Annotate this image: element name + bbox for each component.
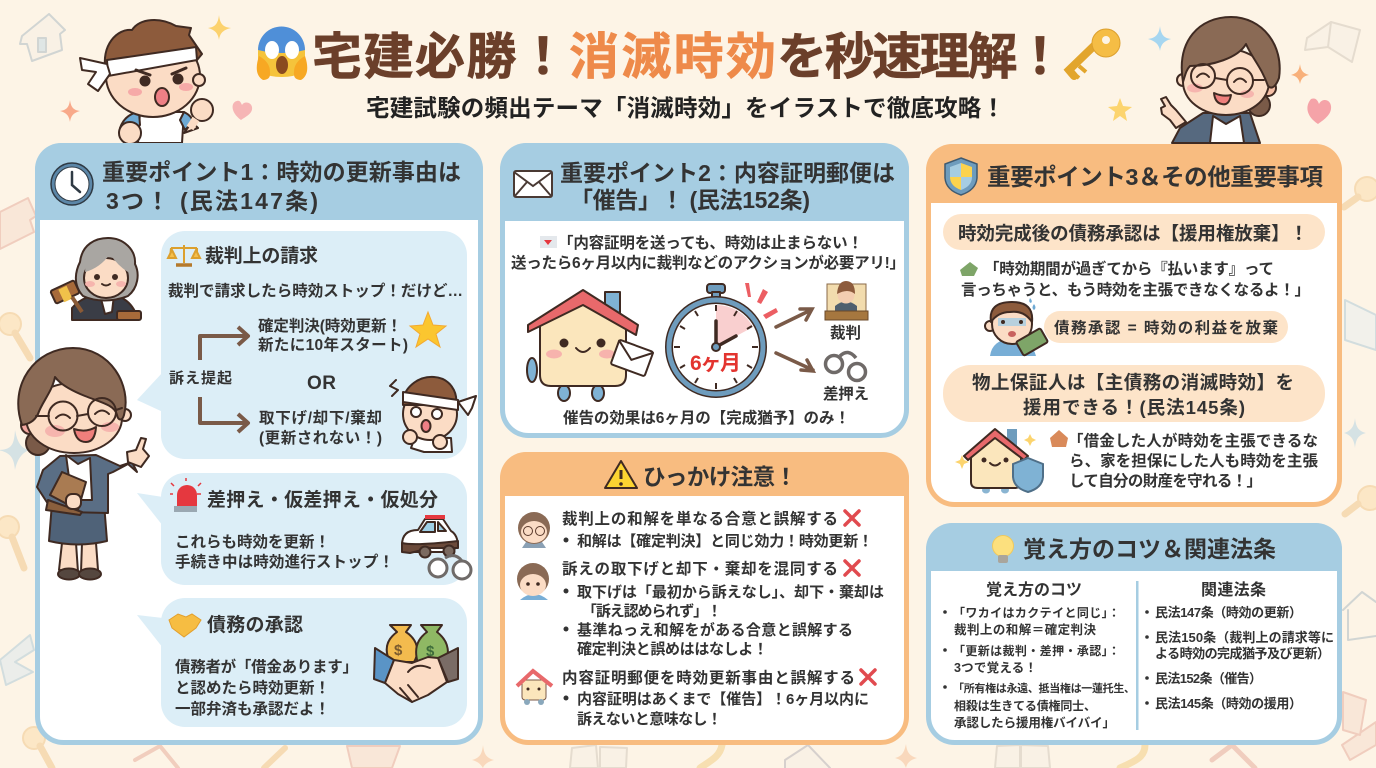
panel: important point 2: 催告の効果は6ヶ月の【完成猶予】のみ！ bbox=[563, 408, 850, 427]
quote: saying I will pay: 「時効期間が過ぎてから『払います』って bbox=[984, 259, 1274, 278]
item 2: 基準ねっえ和解をがある合意と誤解する bbox=[577, 621, 853, 639]
panel: trap warnings: ひっかけ注意！ bbox=[643, 465, 797, 490]
icon: light bulb bbox=[992, 536, 1014, 563]
callout: debt acknowledgment: 債務の承認 bbox=[207, 614, 303, 636]
icon: money bags and handshake: $ bbox=[426, 643, 435, 660]
stopwatch showing 6 months bbox=[669, 283, 778, 394]
column: memory tips: 承認したら援用権バイバイ」 bbox=[954, 715, 1115, 730]
subheading: debt acknowledgment after completion bbox=[943, 214, 1325, 250]
title: を秒速理解！ bbox=[777, 29, 1065, 85]
column: related articles: 民法152条（催告） bbox=[1155, 671, 1262, 686]
main teacher character bbox=[18, 348, 149, 580]
column: memory tips: 3つで覚える！ bbox=[954, 660, 1037, 675]
heading: point 2: 「催告」！ (民法152条) bbox=[570, 187, 810, 213]
heading: point 1: 3つ！ (民法147条) bbox=[106, 188, 318, 214]
branch arrows bbox=[200, 327, 248, 432]
column: related articles: 民法150条（裁判上の請求等に bbox=[1155, 630, 1334, 645]
callout: judicial claim: OR bbox=[307, 373, 336, 394]
panel: memory tips and related articles: 覚え方のコツ＆関連法条 bbox=[1023, 536, 1276, 562]
icon: siren bbox=[170, 478, 201, 512]
callout: judicial claim: 訴え提起 bbox=[169, 370, 232, 387]
item 1 bbox=[562, 509, 873, 550]
item 2: 訴えの取下げと却下・棄却を混同する bbox=[562, 559, 838, 578]
icon: house avatar bbox=[517, 671, 552, 705]
callout: debt acknowledgment bbox=[137, 598, 467, 727]
callout: seizure bbox=[137, 473, 471, 585]
crying boy with money bbox=[985, 298, 1048, 356]
callout: judicial claim: 取下げ/却下/棄却 bbox=[259, 408, 382, 427]
item 3: 内容証明郵便を時効更新事由と誤解する bbox=[562, 668, 855, 687]
item 3: 内容証明はあくまで【催告】！6ヶ月以内に bbox=[577, 690, 869, 708]
callout: judicial claim bbox=[137, 231, 476, 459]
arrows to trial and seizure bbox=[776, 309, 813, 371]
column: memory tips: 「更新は裁判・差押・承認」： bbox=[953, 643, 1120, 658]
house with shield bbox=[955, 429, 1043, 494]
panel: important point 1 bbox=[18, 143, 483, 742]
item 1: 裁判上の和解を単なる合意と誤解する bbox=[562, 509, 838, 528]
column: related articles: 民法147条（時効の更新） bbox=[1155, 605, 1302, 620]
column: memory tips bbox=[943, 580, 1135, 730]
column: related articles: 民法145条（時効の援用） bbox=[1155, 696, 1302, 711]
column: memory tips: 相殺は生きてる債権同士、 bbox=[954, 698, 1096, 713]
title bbox=[257, 27, 1120, 85]
callout: debt acknowledgment: 債務者が「借金あります」 bbox=[175, 657, 358, 676]
quote text: 送ったら6ヶ月以内に裁判などのアクションが必要アリ!」 bbox=[511, 253, 905, 272]
quote: borrower and pledger: ら、家を担保にした人も時効を主張 bbox=[1069, 452, 1318, 470]
quote text bbox=[511, 234, 905, 272]
house with letter bbox=[527, 290, 653, 401]
callout: seizure: これらも時効を更新！ bbox=[175, 533, 330, 551]
pill: debt acknowledgment bbox=[1044, 311, 1288, 343]
column: related articles: 関連法条 bbox=[1201, 580, 1266, 599]
icon: envelope bbox=[514, 171, 552, 197]
panel: important point 2 bbox=[500, 143, 909, 436]
panel: important point 2: 裁判 bbox=[830, 324, 861, 342]
subheading: debt acknowledgment after completion: 時効完成後の債務承認は【援用権放棄】！ bbox=[958, 223, 1308, 244]
column: related articles: よる時効の完成猶予及び更新） bbox=[1155, 646, 1330, 661]
heading: point 1 bbox=[102, 159, 461, 214]
column: memory tips: 「所有権は永遠、抵当権は一蓮托生、 bbox=[953, 681, 1135, 695]
icon: police car and handcuffs bbox=[402, 515, 471, 579]
quote: saying I will pay bbox=[960, 259, 1310, 299]
panel: trap warnings bbox=[500, 452, 909, 742]
icon: money bags and handshake bbox=[374, 625, 458, 702]
column: memory tips: 覚え方のコツ bbox=[986, 580, 1082, 599]
quote: borrower and pledger bbox=[1050, 430, 1318, 490]
callout: judicial claim: 裁判で請求したら時効ストップ！だけど… bbox=[168, 281, 463, 300]
title: 消滅時効 bbox=[569, 29, 776, 85]
column: memory tips: 「ワカイはカクテイと同じ」： bbox=[953, 606, 1120, 620]
surprised boy bbox=[390, 377, 476, 452]
item 1: 和解は【確定判決】と同じ効力！時効更新！ bbox=[577, 532, 873, 550]
icon: woman avatar bbox=[518, 512, 550, 548]
callout: judicial claim: 裁判上の請求 bbox=[205, 244, 318, 267]
icon: golden key bbox=[1069, 29, 1120, 78]
icon: star bbox=[410, 312, 446, 347]
subtitle: 宅建試験の頻出テーマ「消滅時効」をイラストで徹底攻略！ bbox=[366, 95, 1005, 121]
callout: seizure: 差押え・仮差押え・仮処分 bbox=[207, 489, 438, 511]
icon: screaming face bbox=[257, 27, 307, 80]
icon: handshake bbox=[169, 614, 201, 637]
icon: warning triangle bbox=[605, 461, 637, 488]
boy with headband bbox=[80, 20, 213, 144]
quote: borrower and pledger: して自分の財産を守れる！」 bbox=[1069, 472, 1262, 490]
pill: debt acknowledgment: 債務承認 = 時効の利益を放棄 bbox=[1054, 318, 1278, 337]
icon: court judge bbox=[825, 281, 868, 320]
callout: judicial claim: 確定判決(時効更新！ bbox=[258, 316, 402, 335]
quote text: 「内容証明を送っても、時効は止まらない！ bbox=[558, 234, 863, 252]
item 2: 確定判決と誤めははなしよ！ bbox=[577, 640, 768, 658]
callout: judicial claim: (更新されない！) bbox=[259, 429, 382, 447]
heading: point 2: 重要ポイント2：内容証明郵便は bbox=[560, 160, 895, 186]
subheading: third-party pledger: 援用できる！(民法145条) bbox=[1023, 397, 1245, 418]
callout: judicial claim: 新たに10年スタート) bbox=[258, 335, 408, 354]
panel: important point 3 bbox=[926, 144, 1342, 504]
subheading: third-party pledger bbox=[943, 365, 1325, 422]
stopwatch showing 6 months: 6ヶ月 bbox=[690, 352, 741, 375]
panel: important point 3: 重要ポイント3＆その他重要事項 bbox=[987, 164, 1324, 190]
subheading: third-party pledger: 物上保証人は【主債務の消滅時効】を bbox=[972, 372, 1294, 393]
callout: debt acknowledgment: 一部弁済も承認だよ！ bbox=[175, 699, 330, 718]
heading: point 1: 重要ポイント1：時効の更新事由は bbox=[102, 159, 461, 185]
icon: scales bbox=[168, 245, 200, 265]
panel: important point 2: 差押え bbox=[823, 384, 869, 403]
teacher top right bbox=[1161, 17, 1280, 143]
icon: money bags and handshake: $ bbox=[394, 642, 403, 659]
callout: seizure: 手続き中は時効進行ストップ！ bbox=[175, 552, 394, 571]
item 3: 訴えないと意味なし！ bbox=[577, 711, 722, 728]
item 3 bbox=[562, 668, 875, 728]
icon: shield bbox=[945, 158, 977, 195]
column: related articles bbox=[1145, 580, 1334, 711]
decorative sparkles and hearts bbox=[60, 15, 1331, 124]
icon: handcuffs bbox=[826, 352, 866, 380]
icon: boy avatar bbox=[517, 563, 549, 600]
item 2: 取下げは「最初から訴えなし」、却下・棄却は bbox=[577, 583, 884, 601]
judge character bbox=[50, 238, 141, 320]
column: memory tips: 裁判上の和解＝確定判決 bbox=[954, 622, 1096, 637]
quote: saying I will pay: 言っちゃうと、もう時効を主張できなくなるよ！」 bbox=[961, 281, 1310, 299]
heading: point 2 bbox=[560, 160, 895, 213]
title: 宅建必勝！ bbox=[312, 29, 568, 85]
item 2 bbox=[562, 559, 884, 658]
item 2: 「訴え認められず」！ bbox=[582, 603, 722, 620]
quote: borrower and pledger: 「借金した人が時効を主張できるな bbox=[1068, 431, 1318, 450]
callout: debt acknowledgment: と認めたら時効更新！ bbox=[175, 679, 330, 697]
icon: clock bbox=[51, 163, 93, 205]
panel: memory tips and related articles bbox=[926, 523, 1342, 742]
